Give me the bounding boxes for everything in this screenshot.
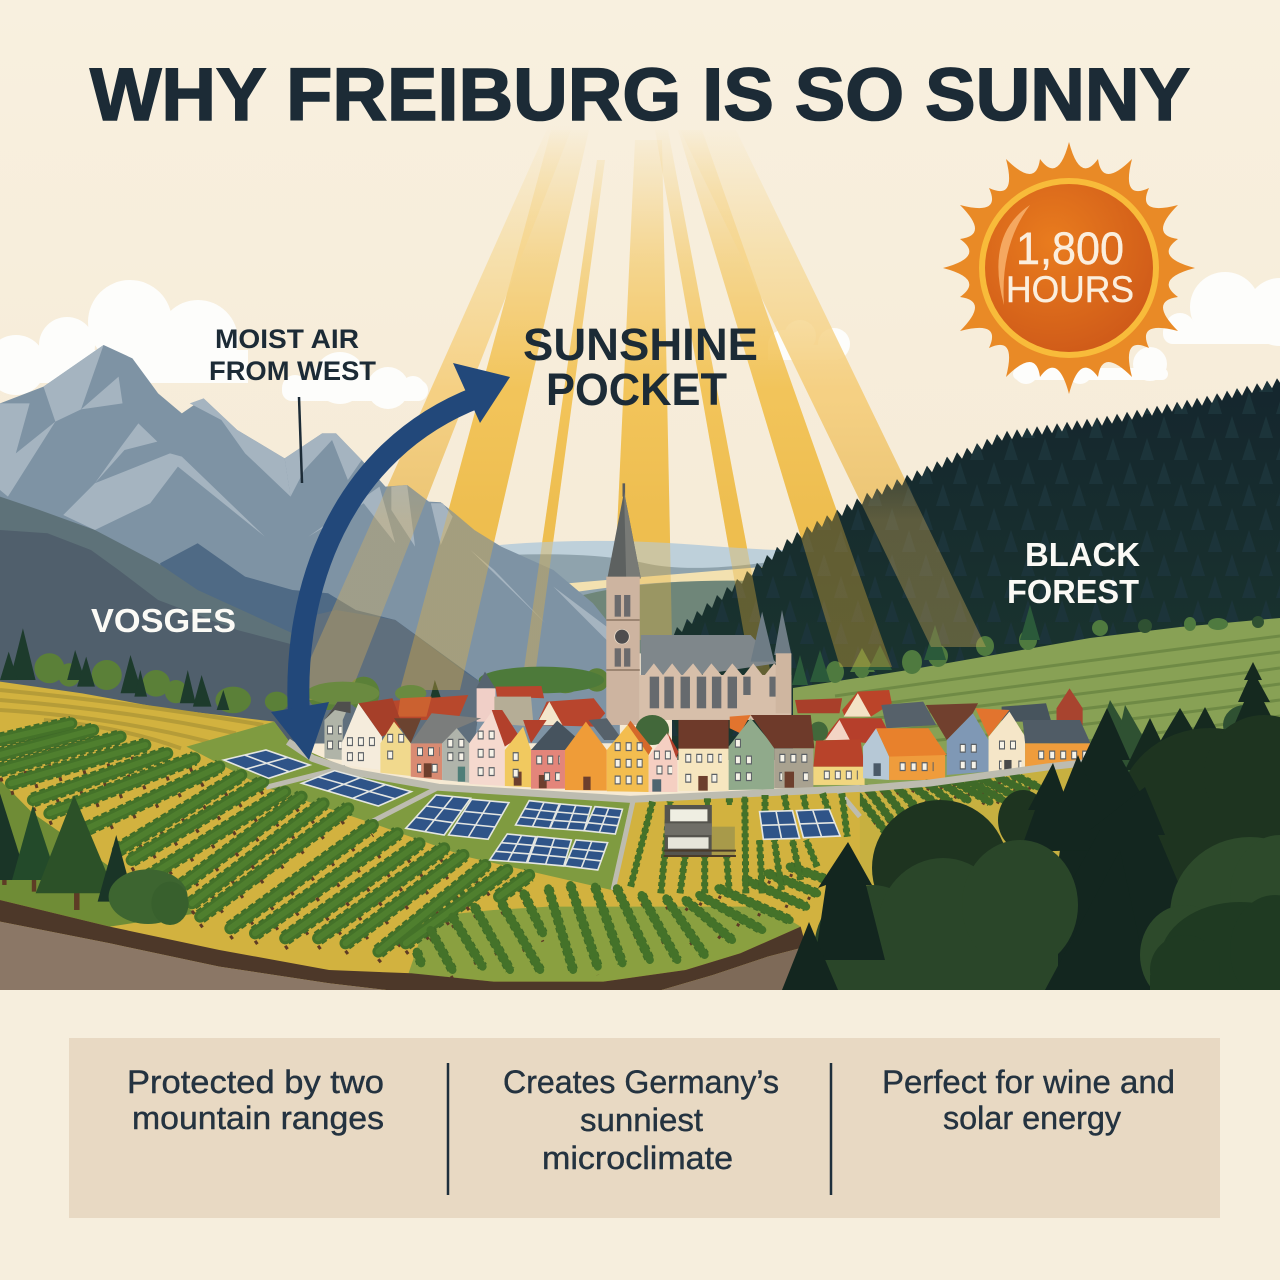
label: sunshine pocket: POCKET bbox=[546, 364, 727, 415]
distant valley hills bbox=[500, 541, 808, 653]
label: vosges: VOSGES bbox=[91, 602, 236, 639]
soil band bbox=[0, 900, 806, 991]
nave roof bbox=[641, 635, 777, 683]
vine rows: lower field bbox=[417, 867, 828, 978]
vineyard extension east of village bbox=[853, 757, 1137, 990]
label: moist air: FROM WEST bbox=[209, 356, 377, 386]
left trees bbox=[0, 793, 189, 925]
spire bbox=[607, 483, 641, 578]
side paths bbox=[266, 767, 860, 890]
solar panels bbox=[224, 750, 840, 870]
label cloud bbox=[282, 352, 428, 409]
sun rays over landscape bbox=[292, 120, 986, 700]
side spires bbox=[751, 610, 791, 713]
label: black forest: FOREST bbox=[1007, 573, 1139, 610]
air flow arrow bbox=[271, 363, 510, 760]
front left bushes bbox=[814, 840, 1078, 1015]
cloud under sun bbox=[1013, 347, 1168, 384]
takeaway: microclimate: microclimate bbox=[542, 1140, 733, 1176]
takeaway: microclimate bbox=[503, 1064, 779, 1176]
vine rows: terraces bbox=[0, 723, 529, 962]
striped upper field bbox=[0, 690, 263, 748]
front row houses bbox=[324, 698, 1090, 792]
back green trees bbox=[1090, 700, 1267, 775]
title: WHY FREIBURG IS SO SUNNY bbox=[90, 53, 1190, 136]
road bbox=[288, 742, 860, 799]
label: sunshine pocket: SUNSHINE bbox=[523, 319, 758, 370]
trees along forest edge bbox=[792, 605, 1264, 685]
large conifers bbox=[1020, 708, 1195, 990]
label: sunshine pocket bbox=[523, 319, 758, 415]
nave wall with gothic windows bbox=[640, 663, 791, 720]
doors bbox=[424, 760, 1012, 792]
ground and vineyards bbox=[0, 682, 860, 991]
black forest slope bbox=[672, 378, 1280, 760]
right cloud bbox=[1163, 272, 1280, 346]
takeaway: protection: mountain ranges bbox=[132, 1100, 384, 1136]
left cloud bbox=[0, 280, 248, 395]
farm building bbox=[664, 805, 736, 857]
right green hillside field bbox=[793, 618, 1280, 790]
panel: key takeaways bbox=[69, 1038, 1220, 1218]
vine rows: upper right field bbox=[631, 793, 847, 893]
church: freiburg minster bbox=[606, 483, 791, 725]
takeaway: wine and solar bbox=[882, 1064, 1175, 1136]
back row houses bbox=[306, 667, 1083, 745]
page strip below illustration bbox=[0, 990, 1280, 1280]
takeaway: protection bbox=[127, 1064, 384, 1136]
ground base bbox=[0, 682, 860, 991]
sun unit: HOURS bbox=[1006, 269, 1134, 310]
back bushes bbox=[872, 715, 1280, 990]
takeaway: microclimate: sunniest bbox=[580, 1102, 703, 1138]
takeaway: wine and solar: Perfect for wine and bbox=[882, 1064, 1175, 1100]
label: moist air bbox=[209, 324, 377, 483]
pocket cloud bbox=[768, 320, 850, 360]
vosges mountains bbox=[0, 345, 620, 743]
label: black forest bbox=[1007, 536, 1140, 610]
takeaway: wine and solar: solar energy bbox=[943, 1100, 1121, 1136]
sun badge bbox=[943, 142, 1195, 394]
right front bushes bbox=[1140, 835, 1280, 1005]
tree line below vosges bbox=[0, 628, 609, 713]
village bbox=[306, 667, 1090, 792]
windows bbox=[327, 730, 1088, 780]
right foreground trees and bushes bbox=[782, 662, 1280, 1018]
green meadow lower field bbox=[409, 907, 801, 982]
road bottom right bbox=[658, 947, 806, 991]
road bottom left bbox=[0, 922, 395, 991]
label: moist air: MOIST AIR bbox=[215, 324, 359, 354]
sun rays behind mountains bbox=[292, 120, 986, 700]
tower bbox=[606, 577, 640, 725]
back conifers bbox=[1125, 662, 1278, 770]
sun value: 1,800 bbox=[1016, 223, 1124, 274]
takeaway: microclimate: Creates Germany’s bbox=[503, 1064, 779, 1100]
label: black forest: BLACK bbox=[1025, 536, 1140, 573]
takeaway: protection: Protected by two bbox=[127, 1064, 384, 1100]
green meadow around solar panels bbox=[186, 722, 631, 890]
green meadow lower left bbox=[0, 780, 197, 927]
sky background bbox=[0, 0, 1280, 990]
front conifers bbox=[782, 842, 1150, 990]
